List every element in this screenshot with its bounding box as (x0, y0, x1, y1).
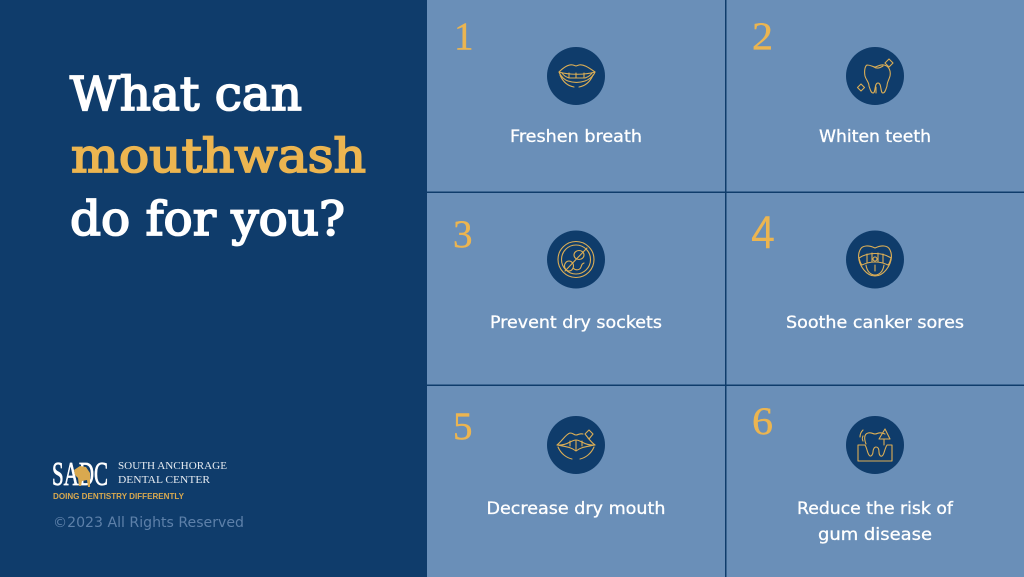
icon: smiling mouth (559, 65, 595, 87)
panel: benefits grid (427, 0, 1024, 577)
logo: SADC (52, 456, 108, 493)
title: mouthwash (71, 129, 366, 184)
logo (52, 456, 227, 501)
card 5: decrease dry mouth: 5 (453, 405, 472, 448)
card 6: reduce gum disease risk: 6 (752, 400, 773, 443)
icon: open mouth with sore (859, 246, 891, 276)
card 6: reduce gum disease risk: Reduce the risk of (797, 499, 954, 518)
icon: sparkling tooth (858, 59, 893, 93)
icon: crossed-out germs (558, 242, 594, 278)
card 2: whiten teeth: Whiten teeth (819, 127, 931, 146)
card 4: soothe canker sores: Soothe canker sores (786, 313, 964, 332)
logo: DENTAL CENTER (118, 474, 211, 486)
card 3: prevent dry sockets: 3 (453, 213, 472, 256)
card 1: freshen breath (454, 15, 642, 146)
card 1: freshen breath: 1 (454, 15, 474, 58)
card 5: decrease dry mouth: Decrease dry mouth (486, 499, 666, 518)
logo: DOING DENTISTRY DIFFERENTLY (53, 491, 184, 501)
card 6: reduce gum disease risk: gum disease (818, 525, 932, 544)
card 5: decrease dry mouth (453, 405, 666, 518)
card 6: reduce gum disease risk (752, 400, 954, 544)
logo: SOUTH ANCHORAGE (118, 460, 227, 472)
title (70, 67, 366, 247)
card 3: prevent dry sockets: Prevent dry sockets (490, 313, 662, 332)
card 4: soothe canker sores (751, 206, 964, 332)
title: What can (70, 67, 302, 122)
card 4: soothe canker sores: 4 (751, 206, 775, 258)
card 2: whiten teeth: 2 (752, 15, 773, 58)
icon: tooth, gum and warning (858, 429, 892, 461)
card 3: prevent dry sockets (453, 213, 662, 332)
card 1: freshen breath: Freshen breath (510, 127, 642, 146)
title: do for you? (70, 192, 345, 247)
copyright: ©2023 All Rights Reserved (53, 515, 244, 531)
card 2: whiten teeth (752, 15, 931, 146)
icon: lips with sparkle (557, 430, 595, 459)
